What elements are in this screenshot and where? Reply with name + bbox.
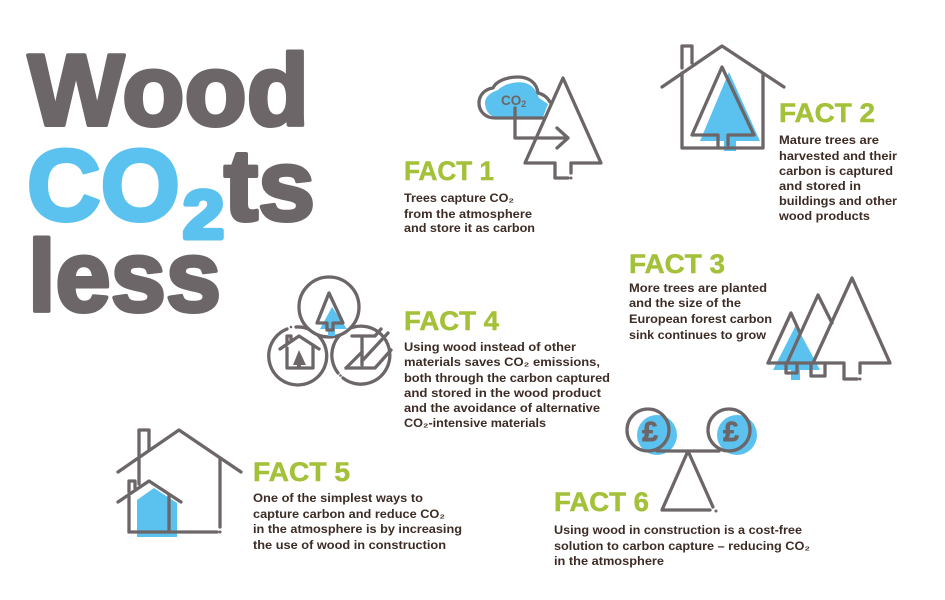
fact 3 text: [629, 249, 772, 342]
fact 3 text: More trees are planted: [629, 282, 767, 295]
fact 1 text: [404, 156, 535, 235]
fact 1 text: FACT 1: [404, 156, 494, 186]
fact 5 text: One of the simplest ways to: [253, 492, 423, 505]
fact 2 text: Mature trees are: [779, 134, 880, 147]
icon: balance scale with pound coins: £: [723, 416, 739, 447]
fact 4 text: and stored in the wood product: [404, 387, 601, 400]
fact 3 text: FACT 3: [629, 249, 725, 279]
fact 5 text: capture carbon and reduce CO₂: [253, 508, 445, 521]
icon: cloud, CO2 arrow and tree: CO: [501, 93, 521, 108]
icon: house with tree: [662, 46, 784, 151]
fact 3 text: and the size of the: [629, 297, 742, 310]
fact 6 text: solution to carbon capture – reducing CO₂: [554, 540, 810, 553]
fact 4 text: FACT 4: [404, 306, 499, 336]
title: Wood CO2ts less: ts: [224, 130, 315, 242]
fact 5 text: the use of wood in construction: [253, 539, 446, 552]
fact 4 text: and the avoidance of alternative: [404, 402, 601, 415]
fact 5 text: [253, 457, 462, 552]
title: Wood CO2ts less: CO: [27, 130, 180, 242]
fact 2 text: [778, 98, 897, 223]
fact 6 text: [554, 487, 810, 568]
fact 5 text: in the atmosphere is by increasing: [253, 523, 462, 536]
icon: three growing trees: [768, 278, 890, 380]
title: Wood CO2ts less: Wood: [28, 35, 309, 147]
fact 1 text: from the atmosphere: [404, 208, 533, 221]
title: Wood CO2ts less: less: [28, 221, 221, 333]
fact 6 text: in the atmosphere: [554, 555, 665, 568]
fact 4 text: [404, 306, 610, 430]
fact 4 text: CO₂-intensive materials: [404, 417, 547, 430]
fact 3 text: sink continues to grow: [629, 329, 767, 342]
icon: balance scale with pound coins: [627, 409, 757, 512]
fact 2 text: FACT 2: [779, 98, 875, 128]
fact 1 text: Trees capture CO₂: [404, 192, 514, 205]
icon: cloud, CO2 arrow and tree: 2: [521, 99, 526, 109]
fact 4 text: both through the carbon captured: [404, 372, 610, 385]
fact 5 text: FACT 5: [253, 457, 350, 487]
icon: cloud, CO2 arrow and tree: [479, 77, 601, 180]
fact 2 text: carbon is captured: [779, 165, 893, 178]
fact 2 text: buildings and other: [779, 195, 897, 208]
fact 2 text: and stored in: [779, 180, 861, 193]
fact 6 text: Using wood in construction is a cost-free: [554, 524, 803, 537]
fact 6 text: FACT 6: [554, 487, 649, 517]
fact 4 text: materials saves CO₂ emissions,: [404, 356, 600, 369]
fact 1 text: and store it as carbon: [404, 222, 535, 235]
fact 2 text: wood products: [778, 210, 871, 223]
fact 4 text: Using wood instead of other: [404, 341, 576, 354]
icon: three circles with tree, house and wood: [269, 277, 391, 385]
fact 2 text: harvested and their: [779, 150, 897, 163]
fact 3 text: European forest carbon: [629, 313, 772, 326]
title: Wood CO2ts less: [27, 35, 315, 333]
icon: balance scale with pound coins: £: [642, 416, 658, 447]
icon: large and small house: [118, 430, 241, 537]
title: Wood CO2ts less: 2: [183, 177, 224, 253]
